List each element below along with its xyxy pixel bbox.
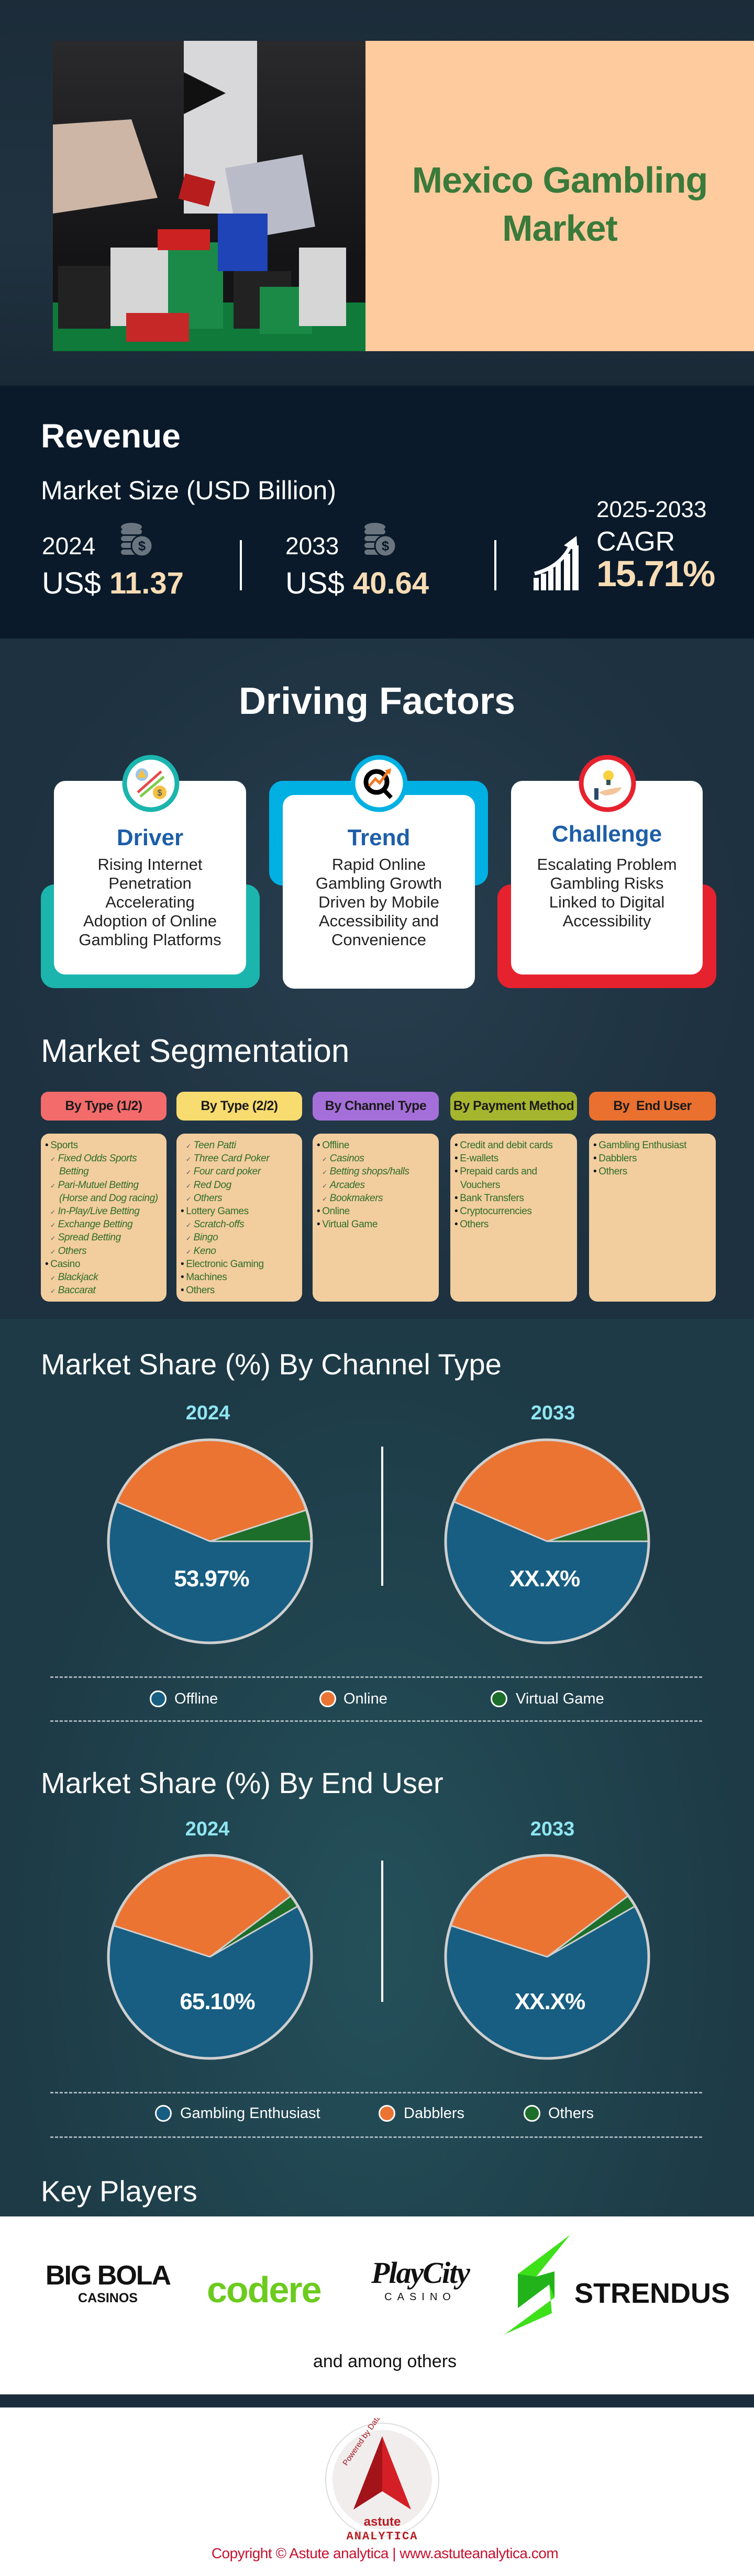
text: Others <box>194 1193 222 1204</box>
text: E-wallets <box>460 1153 498 1164</box>
heading: market share by end user: Market Share (%) By End User <box>41 1766 443 1799</box>
panel: trend: Accessibility and <box>319 912 439 930</box>
CAGR: CAGR <box>596 527 675 557</box>
legend: channel: Online <box>343 1690 387 1707</box>
text: Lottery Games <box>186 1206 249 1217</box>
pie chart: channel 2024: 53.97% <box>174 1566 249 1592</box>
segmentation: by type 2/2: By Type (2/2) <box>201 1099 278 1113</box>
panel: trend: Trend <box>348 825 410 850</box>
logo: big bola <box>46 2260 171 2305</box>
panel: challenge: Challenge <box>552 821 662 847</box>
text: Keno <box>194 1246 216 1257</box>
icon: coins: $ <box>382 538 390 554</box>
text: Blackjack <box>58 1272 98 1283</box>
icon: coins: $ <box>138 538 146 554</box>
text: Four card poker <box>194 1166 261 1177</box>
panel: trend: Driven by Mobile <box>318 893 439 911</box>
icon: growth chart <box>534 536 579 590</box>
legend: channel: Offline <box>174 1690 218 1707</box>
text: and among others: and among others <box>313 2351 457 2371</box>
segmentation: by type 2/2 <box>176 1092 302 1121</box>
label 2024: 2024 <box>186 1402 230 1424</box>
market size label: Market Size (USD Billion) <box>41 476 336 505</box>
text: Online <box>322 1206 350 1217</box>
text: In-Play/Live Betting <box>58 1206 139 1217</box>
2024 value: 2024 <box>42 532 95 559</box>
text: Others <box>58 1246 86 1257</box>
text: Casinos <box>330 1153 364 1164</box>
legend: end user <box>155 2105 594 2122</box>
segmentation: by end user: By End User <box>613 1099 692 1113</box>
icon: coins <box>364 523 395 556</box>
logo: astute analytica: astute <box>364 2515 401 2529</box>
legend: end user: Others <box>548 2105 594 2122</box>
text: Cryptocurrencies <box>460 1206 531 1217</box>
2033 value: US$ 40.64 <box>285 566 429 600</box>
panel: challenge: Gambling Risks <box>550 874 664 892</box>
segmentation: by channel type <box>313 1092 439 1121</box>
CAGR: 2025-2033 <box>596 497 706 522</box>
text: Credit and debit cards <box>460 1140 552 1151</box>
text: Gambling Enthusiast <box>598 1140 686 1151</box>
panel: challenge: Accessibility <box>563 912 651 930</box>
text: Casino <box>50 1259 80 1270</box>
text: Bingo <box>194 1232 218 1243</box>
header photo <box>53 41 365 351</box>
text: Pari-Mutuel Betting (Horse and Dog racing) <box>58 1180 158 1204</box>
text: Virtual Game <box>322 1219 378 1230</box>
segmentation: by channel type: By Channel Type <box>325 1099 426 1113</box>
panel: driver: Penetration <box>108 874 192 892</box>
pie chart: end user 2024 <box>107 1854 313 2060</box>
2033 value: 2033 <box>285 532 339 559</box>
title: Mexico Gambling <box>412 160 707 200</box>
text: Others <box>186 1285 215 1296</box>
panel: driver: Rising Internet <box>98 855 202 873</box>
title <box>412 160 707 249</box>
CAGR: 15.71% <box>596 553 714 594</box>
pie chart: channel 2033 <box>444 1438 650 1644</box>
panel: driver <box>41 755 260 988</box>
text: Others <box>598 1166 627 1177</box>
panel: trend <box>269 755 488 989</box>
logo: astute analytica <box>325 2418 439 2543</box>
text: Three Card Poker <box>194 1153 269 1164</box>
logo: codere: codere <box>207 2269 321 2310</box>
logo: strendus: STRENDUS <box>574 2278 730 2309</box>
panel: challenge <box>497 755 716 988</box>
icon: driver <box>123 755 179 812</box>
panel: trend: Rapid Online <box>332 855 426 873</box>
logo: big bola: BIG BOLA <box>46 2260 170 2291</box>
revenue band <box>0 386 754 639</box>
text: Fixed Odds Sports Betting <box>58 1153 137 1177</box>
title panel <box>365 41 754 351</box>
panel: trend: Gambling Growth <box>316 874 442 892</box>
text: Teen Patti <box>194 1140 236 1151</box>
text: Arcades <box>330 1180 365 1191</box>
text: Baccarat <box>58 1285 95 1296</box>
background: casino sections <box>0 0 754 386</box>
text: Offline <box>322 1140 349 1151</box>
text: Red Dog <box>194 1180 231 1191</box>
text: Dabblers <box>598 1153 637 1164</box>
panel: challenge: Escalating Problem <box>537 855 677 873</box>
icon: challenge <box>579 755 636 812</box>
logo: big bola: CASINOS <box>78 2291 138 2305</box>
pie chart: end user 2024: 65.10% <box>180 1989 255 2014</box>
legend: channel <box>150 1690 604 1707</box>
heading: key players: Key Players <box>41 2175 197 2208</box>
pie chart: channel 2024 <box>107 1438 313 1644</box>
logo: astute analytica: ANALYTICA <box>347 2530 418 2543</box>
segmentation: by type 1/2 <box>41 1092 167 1121</box>
legend: end user: Gambling Enthusiast <box>180 2105 320 2122</box>
pie chart: channel 2033: XX.X% <box>509 1566 580 1592</box>
segmentation: by type 1/2: By Type (1/2) <box>65 1099 142 1113</box>
segmentation: by payment method <box>450 1092 577 1121</box>
icon: coins <box>121 523 152 556</box>
text: Spread Betting <box>58 1232 121 1243</box>
panel: key players logos <box>0 2216 754 2394</box>
2033 value <box>285 523 429 600</box>
icon: driver: $ <box>158 789 162 798</box>
title: Market <box>502 208 617 249</box>
panel: driver: Accelerating <box>105 893 195 911</box>
2024 value: US$ 11.37 <box>42 566 184 600</box>
text: Electronic Gaming <box>186 1259 264 1270</box>
panel: driver: Driver <box>117 825 183 850</box>
icon: trend <box>351 755 407 812</box>
heading: market share by channel type: Market Share (%) By Channel Type <box>41 1348 502 1381</box>
legend: channel: Virtual Game <box>516 1690 604 1707</box>
pie chart: end user 2033 <box>444 1854 650 2060</box>
panel: challenge: Linked to Digital <box>549 893 664 911</box>
driving factors heading: Driving Factors <box>239 680 515 722</box>
copyright: Copyright © Astute analytica | www.astuteanalytica.com <box>212 2545 558 2561</box>
logo: playcity: PlayCity <box>371 2256 469 2290</box>
text: Bookmakers <box>330 1193 383 1204</box>
logo: strendus <box>505 2235 730 2334</box>
segmentation: by end user <box>589 1092 716 1121</box>
CAGR <box>596 497 714 594</box>
pie chart: end user 2033: XX.X% <box>515 1989 585 2014</box>
revenue heading: Revenue <box>41 417 181 455</box>
label 2024: 2024 <box>185 1818 229 1840</box>
legend: end user: Dabblers <box>404 2105 464 2122</box>
text: Bank Transfers <box>460 1193 524 1204</box>
text: Exchange Betting <box>58 1219 132 1230</box>
footer <box>0 2407 754 2576</box>
text: Sports <box>50 1140 78 1151</box>
text: Prepaid cards and Vouchers <box>460 1166 537 1191</box>
panel: driver: Adoption of Online <box>83 912 217 930</box>
heading: market segmentation: Market Segmentation <box>41 1033 349 1069</box>
text: Scratch-offs <box>194 1219 244 1230</box>
2024 value <box>42 523 184 600</box>
logo: playcity: CASINO <box>384 2291 456 2303</box>
segmentation: by payment method: By Payment Method <box>453 1099 574 1113</box>
text: Betting shops/halls <box>330 1166 409 1177</box>
panel: trend: Convenience <box>331 931 426 949</box>
label 2033: 2033 <box>530 1818 574 1840</box>
text: Others <box>460 1219 489 1230</box>
text: Machines <box>186 1272 227 1283</box>
label 2033: 2033 <box>531 1402 575 1424</box>
panel: driver: Gambling Platforms <box>79 931 221 949</box>
